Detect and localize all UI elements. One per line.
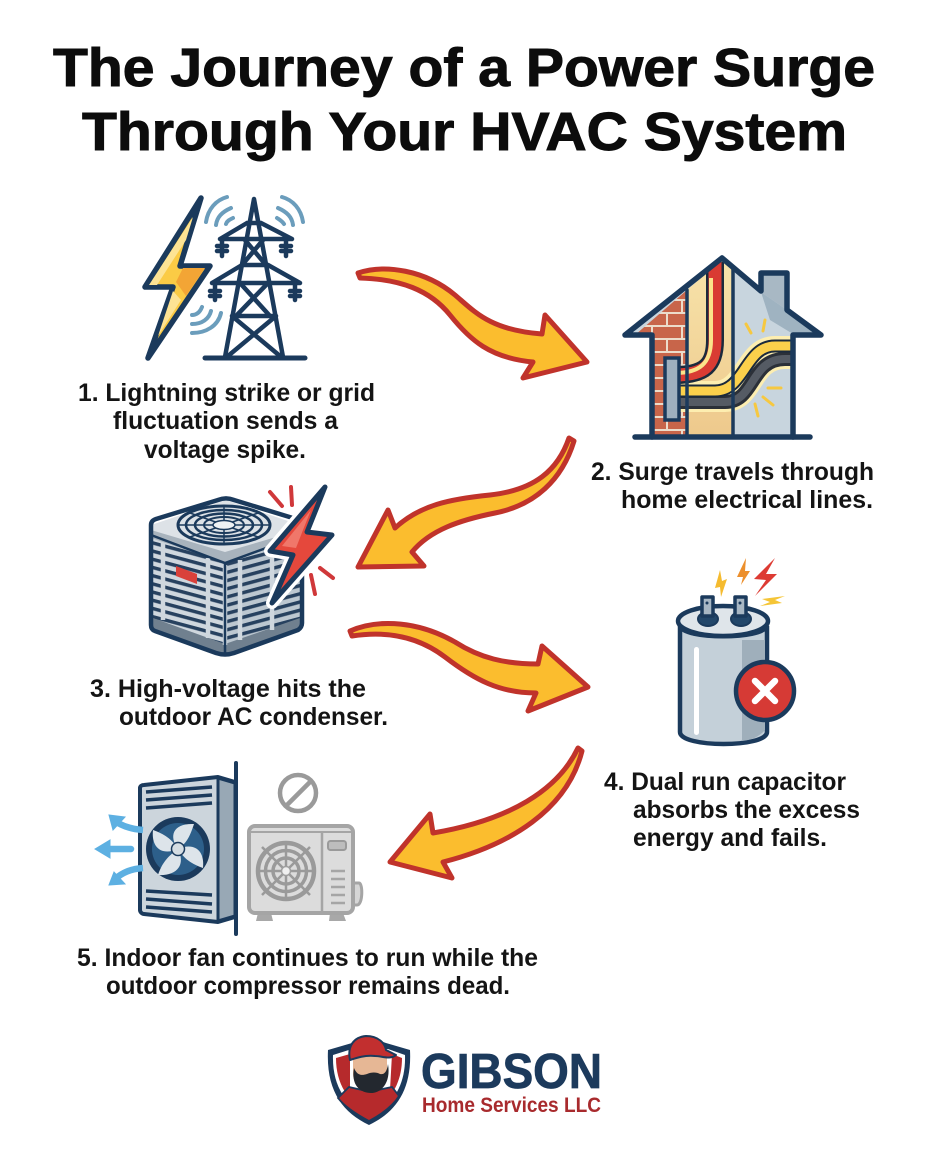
title: The Journey of a Power Surge [53,38,875,98]
label: step 3: 3. High-voltage hits the [90,675,366,703]
signal waves [192,197,303,333]
lightning bolt [145,198,210,358]
condenser body [151,498,302,655]
terminals [698,612,751,626]
impact marks [270,487,333,594]
label: step 4 [604,768,860,852]
icon: indoor fan and dead outdoor compressor [95,763,362,934]
label: step 2: 2. Surge travels through [591,458,874,486]
logo: Gibson Home Services [328,1036,602,1125]
shirt [338,1087,399,1121]
house walls [625,258,821,437]
sparks [715,558,785,606]
wires [675,262,793,402]
fan grille [178,506,270,544]
label: step 5: outdoor compressor remains dead. [106,972,510,1000]
face [353,1056,387,1089]
company subtitle: Home Services LLC [422,1094,601,1117]
arrow: step 1 to 2 [358,269,587,378]
arrow: step 4 to 5 [390,748,582,878]
label: step 2: home electrical lines. [621,486,873,514]
title: Through Your HVAC System [82,102,847,162]
label: step 1: fluctuation sends a [113,407,339,435]
red tag [176,566,197,584]
fan [146,817,210,881]
failure X badge [736,662,794,720]
wall line [234,763,238,934]
icon: outdoor AC condenser [151,487,333,655]
service panel [665,358,679,420]
beard [353,1064,389,1093]
air flow arrows [95,815,143,885]
transmission tower [205,199,305,358]
label: step 1: voltage spike. [144,436,306,464]
icon: lightning and transmission tower [145,197,305,358]
arrow: step 2 to 3 [358,438,574,567]
label: step 3: outdoor AC condenser. [119,703,388,731]
label: step 1 [78,379,375,464]
red lightning bolt [270,487,332,603]
icon: house with electrical lines [625,258,821,437]
cap [349,1036,396,1060]
prohibition sign [280,775,316,811]
title [53,38,875,162]
logo shield mascot [328,1036,410,1125]
company name: GIBSON [421,1045,602,1099]
house outline [625,258,821,437]
label: step 4: absorbs the excess [633,796,860,824]
label: step 4: energy and fails. [633,824,827,852]
dead outdoor unit [249,826,362,921]
label: step 3 [90,675,388,731]
icon: failed dual run capacitor [678,558,794,744]
glow sparks [746,320,781,416]
arrow: step 3 to 4 [350,623,588,711]
label: step 2 [591,458,874,514]
label: step 1: 1. Lightning strike or grid [78,379,375,407]
label: step 5: 5. Indoor fan continues to run while the [77,944,538,972]
indoor unit [140,777,235,922]
capacitor top [678,606,768,636]
label: step 4: 4. Dual run capacitor [604,768,846,796]
capacitor body [680,628,767,744]
label: step 5 [77,944,538,1000]
